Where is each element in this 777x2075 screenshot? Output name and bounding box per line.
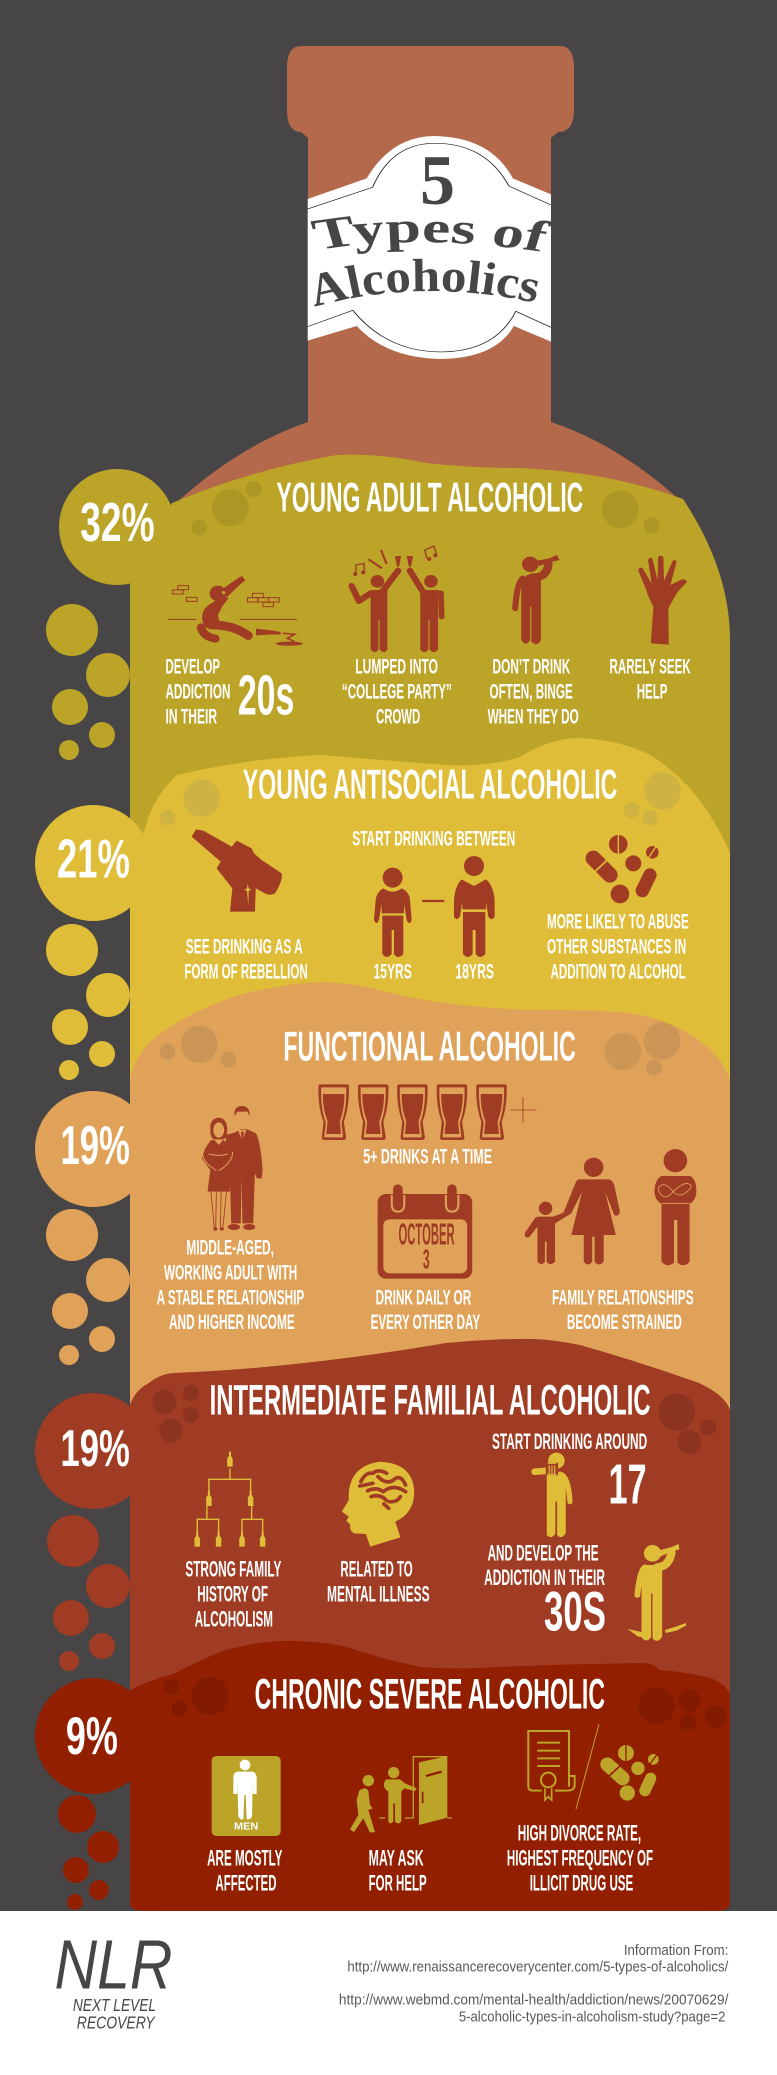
text: family history: [185, 1556, 281, 1631]
panel: young adult alcoholic: DON’T DRINK: [493, 654, 570, 678]
title line: types of: [310, 216, 551, 254]
text: ages: 15YRS: [374, 959, 412, 983]
icon: raised hand: [638, 556, 687, 645]
logo: NLR: NLR: [55, 1927, 172, 2004]
icon: person walking to door: [350, 1756, 452, 1833]
title label: [308, 136, 551, 359]
number: 17: 17: [608, 1453, 647, 1516]
text: college party: CROWD: [376, 704, 420, 728]
text: high divorce rate: [507, 1820, 653, 1895]
text: develop addiction: IN THEIR: [165, 704, 217, 728]
icon: head with brain: [342, 1462, 414, 1547]
icon: calendar: [378, 1184, 472, 1279]
source credits: Information From:: [624, 1943, 728, 1959]
title line: types of: Types of: [310, 216, 551, 254]
panel: young adult alcoholic: [46, 455, 730, 880]
panel: functional alcoholic: EVERY OTHER DAY: [371, 1309, 480, 1334]
text: develop addiction: DEVELOP: [165, 654, 220, 678]
panel: young antisocial alcoholic: [35, 738, 730, 1100]
panel: young antisocial alcoholic: 21%: [57, 828, 130, 889]
source credits: 5-alcoholic-types-in-alcoholism-study?page=2: [459, 2009, 725, 2025]
text: develop addiction in 30s: [484, 1540, 606, 1643]
icon: pills: [607, 1744, 659, 1801]
panel: chronic severe alcoholic: FOR HELP: [369, 1870, 427, 1895]
panel: young antisocial alcoholic: FORM OF REBELLION: [184, 959, 308, 983]
text: mental illness: [327, 1556, 430, 1606]
text: rarely seek help: [609, 654, 691, 703]
title line: alcoholics: Alcoholics: [314, 258, 538, 306]
text: rarely seek help: HELP: [637, 679, 667, 703]
text: develop addiction in 30s: 30S: [544, 1581, 606, 1643]
text: mostly affected: [207, 1845, 282, 1895]
text: develop addiction in 30s: AND DEVELOP THE: [488, 1540, 599, 1565]
icon: two people high five: [352, 546, 442, 652]
panel: young adult alcoholic: 32%: [80, 491, 155, 553]
icon: divorce certificate: [528, 1731, 575, 1800]
text: family history: ALCOHOLISM: [195, 1606, 273, 1631]
logo tagline: RECOVERY: [77, 2012, 156, 2032]
text: mental illness: RELATED TO: [340, 1556, 413, 1581]
icon: hand holding bottle: [192, 829, 282, 912]
icon: 18 year old: [454, 856, 495, 957]
title number: 5: [420, 142, 455, 220]
icon: person drinking: [515, 555, 559, 644]
panel: functional alcoholic: [35, 982, 730, 1420]
bottle neck and shoulders: [176, 46, 683, 560]
panel: functional alcoholic: MIDDLE-AGED,: [186, 1235, 274, 1259]
icon: person with beer mug: [535, 1453, 573, 1537]
text: high divorce rate: ILLICIT DRUG USE: [530, 1870, 633, 1895]
panel: young adult alcoholic: “COLLEGE PARTY”: [342, 679, 452, 703]
text: middle aged: [157, 1235, 304, 1334]
panel: young antisocial alcoholic: 18YRS: [455, 959, 494, 983]
icon: family tree of bottles: [194, 1452, 265, 1547]
percent: 9%: 9%: [66, 1706, 118, 1765]
panel: functional alcoholic: WORKING ADULT WITH: [164, 1260, 297, 1284]
text: high divorce rate: HIGH DIVORCE RATE,: [518, 1820, 641, 1845]
panel: intermediate familial alcoholic: [35, 1339, 730, 1700]
footer: [0, 1911, 777, 2075]
panel: functional alcoholic: OCTOBER: [399, 1217, 455, 1251]
icon: pills: [593, 834, 659, 903]
panel: young adult alcoholic: OFTEN, BINGE: [490, 679, 573, 703]
panel: functional alcoholic: AND HIGHER INCOME: [169, 1309, 295, 1334]
text: drink daily: [371, 1285, 480, 1334]
percent: 19%: 19%: [60, 1420, 130, 1478]
text: binge: [488, 654, 579, 728]
text: may ask for help: [369, 1845, 427, 1895]
text: see drinking as rebellion: [184, 934, 308, 983]
men sign label: MEN: [234, 1821, 258, 1832]
logo tagline: [73, 1995, 156, 2032]
icon: drunk person with bottles: [628, 1544, 686, 1641]
text: family history: HISTORY OF: [197, 1581, 268, 1606]
icon: calendar: 3: [423, 1243, 430, 1274]
panel: functional alcoholic: 5+ DRINKS AT A TIME: [363, 1144, 492, 1168]
icon: couple: [202, 1106, 263, 1231]
panel: young adult alcoholic: WHEN THEY DO: [488, 704, 579, 728]
panel: young antisocial alcoholic: SEE DRINKING AS A: [186, 934, 303, 958]
icon: 15 year old: [374, 868, 412, 957]
text: develop addiction: [165, 654, 294, 728]
panel: young adult alcoholic: LUMPED INTO: [355, 654, 438, 678]
icon: men sign: [212, 1756, 281, 1836]
text: other substances: [547, 909, 689, 983]
dash between ages: [422, 897, 444, 904]
icon: drunk person sitting: [168, 576, 303, 646]
icon: five beer glasses: [318, 1084, 536, 1140]
text: mental illness: MENTAL ILLNESS: [327, 1581, 430, 1606]
text: develop addiction: ADDICTION: [165, 679, 230, 703]
text: college party: [342, 654, 452, 728]
title line: alcoholics: [314, 258, 538, 306]
panel: young adult alcoholic: 20s: [238, 664, 294, 727]
source credits: [339, 1943, 729, 2025]
text: mostly affected: AFFECTED: [216, 1870, 276, 1895]
panel: functional alcoholic: A STABLE RELATIONSHIP: [157, 1285, 304, 1309]
icon: family: [525, 1149, 696, 1265]
logo tagline: NEXT LEVEL: [73, 1995, 156, 2015]
panel: chronic severe alcoholic: [35, 1641, 730, 1911]
panel: intermediate familial alcoholic: STRONG FAMILY: [185, 1556, 281, 1581]
text: develop addiction in 30s: ADDICTION IN THEIR: [484, 1565, 605, 1590]
panel: chronic severe alcoholic: ARE MOSTLY: [207, 1845, 282, 1870]
divider slash: [576, 1724, 599, 1809]
panel: functional alcoholic: 19%: [60, 1114, 130, 1176]
text: may ask for help: MAY ASK: [369, 1845, 424, 1870]
text: family relationships: [552, 1285, 694, 1334]
panel: functional alcoholic: DRINK DAILY OR: [376, 1285, 471, 1309]
